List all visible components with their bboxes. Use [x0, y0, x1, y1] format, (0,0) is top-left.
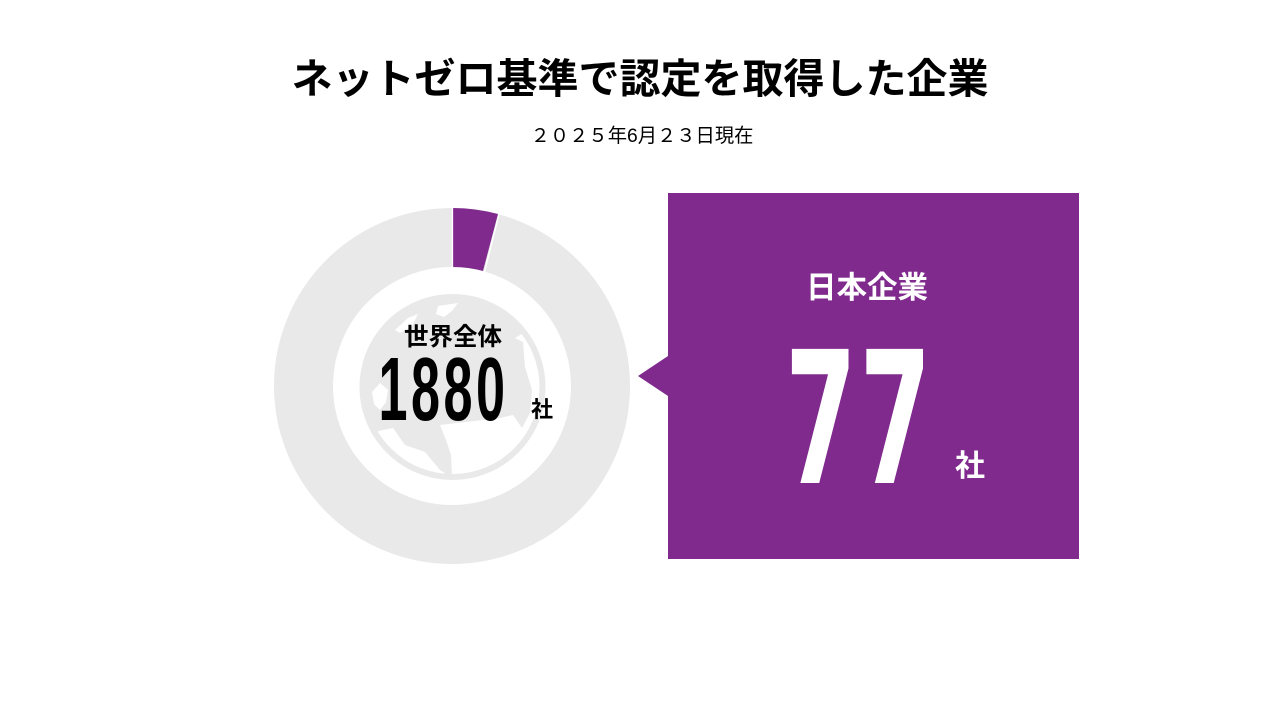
- segment gap: [452, 207, 500, 272]
- donut segment: rest of world: [304, 238, 600, 534]
- donut chart: [304, 207, 600, 534]
- unit: Japanese companies: 社: [955, 450, 985, 483]
- icon: globe: [360, 294, 546, 480]
- title: ネットゼロ基準で認定を取得した企業: [292, 56, 988, 102]
- label: world total: 世界全体: [404, 323, 502, 351]
- donut segment: Japanese companies: [453, 208, 498, 271]
- unit: world companies: 社: [531, 397, 553, 422]
- value: 77: 77: [785, 314, 934, 527]
- infographic canvas: [274, 58, 1079, 564]
- value: 1880: 1880: [378, 338, 509, 440]
- callout: Japanese companies: [638, 193, 1079, 559]
- date subtitle: ２０２５年6月２３日現在: [531, 125, 753, 147]
- callout panel: [668, 193, 1079, 559]
- label: Japanese companies: 日本企業: [806, 271, 928, 305]
- callout pointer: [638, 356, 668, 396]
